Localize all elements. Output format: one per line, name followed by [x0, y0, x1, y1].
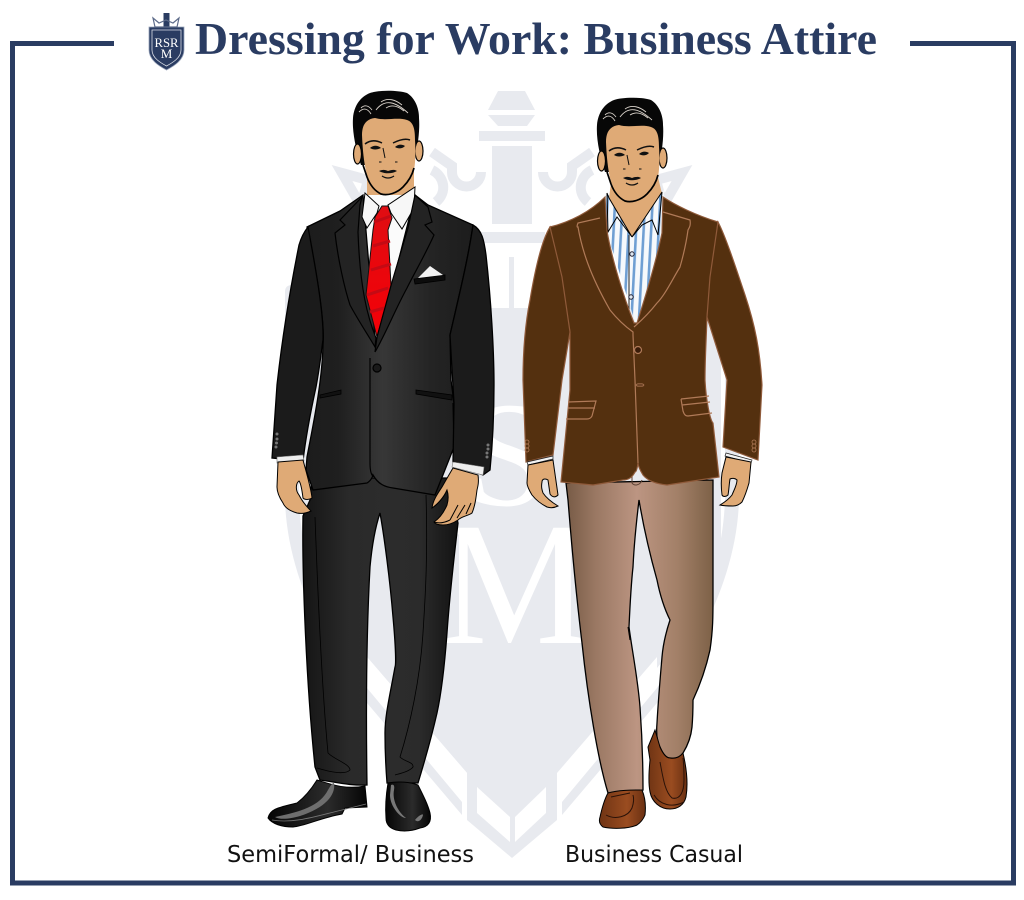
hand: right — [432, 468, 478, 525]
cuffs: casual — [527, 453, 752, 465]
watermark crest — [285, 91, 739, 858]
trousers: khaki — [566, 474, 713, 793]
label: Business Casual: Business Casual — [565, 842, 743, 868]
collar: striped points — [607, 192, 662, 237]
sleeve: right — [450, 225, 494, 475]
figure: business casual — [523, 98, 762, 828]
shoe: right black loafer — [386, 782, 431, 831]
title: Dressing for Work: Business Attire — [195, 14, 877, 64]
shirt: blue stripes — [605, 190, 664, 325]
trousers: black — [303, 478, 458, 785]
icon: logo shield: RSR — [154, 35, 179, 50]
pocket square — [414, 266, 445, 284]
watermark tower — [479, 91, 545, 312]
collar: white points — [362, 187, 415, 229]
jacket: brown body — [550, 197, 719, 485]
head: casual man — [597, 98, 667, 202]
icon: logo shield: M — [161, 46, 173, 61]
figure: semi-formal business suit — [268, 91, 494, 831]
hand: casual right — [720, 457, 751, 506]
tie: red — [366, 206, 392, 337]
hand: casual left — [527, 460, 558, 508]
sleeve: left — [272, 227, 323, 461]
neck — [609, 177, 662, 237]
hand: left — [277, 460, 312, 513]
jacket: black suit body — [306, 195, 473, 495]
label: SemiFormal/ Business: SemiFormal/ Business — [227, 842, 474, 868]
shoe: brown loafer front — [599, 790, 645, 828]
icon: logo shield — [149, 13, 184, 70]
watermark chevrons — [477, 787, 546, 842]
shoe: brown loafer back — [648, 730, 687, 809]
watermark letters: S — [466, 372, 550, 538]
suit button — [373, 364, 381, 372]
shirt: white with collar — [358, 170, 415, 310]
sleeve: left brown — [523, 227, 570, 462]
cuffs: white — [277, 455, 484, 475]
lapels: suit — [335, 195, 434, 352]
watermark swirls — [342, 152, 682, 206]
watermark shield bands — [285, 285, 739, 815]
shoe: left black oxford — [268, 780, 367, 827]
watermark letters: M — [440, 487, 590, 682]
watermark shield interior — [303, 308, 721, 858]
cuff buttons: suit — [274, 432, 490, 458]
jacket buttons — [525, 346, 756, 452]
watermark letters — [440, 372, 590, 682]
jacket trim: lapels, seams, pockets — [566, 212, 712, 463]
head: suit man — [353, 91, 423, 195]
sleeve: right brown — [707, 222, 762, 460]
